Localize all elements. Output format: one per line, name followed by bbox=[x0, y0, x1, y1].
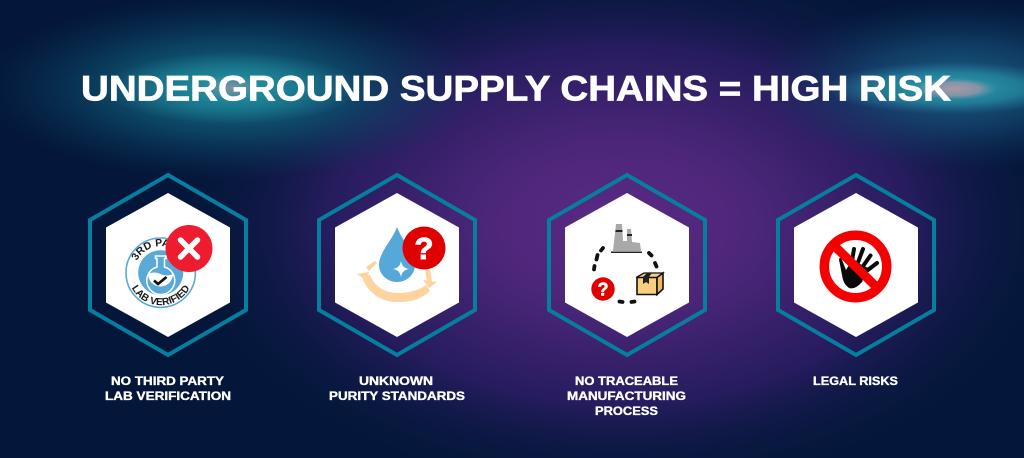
label 3: NO TRACEABLE bbox=[575, 374, 678, 388]
hexagon frame 3 bbox=[549, 175, 705, 355]
icon: lab verified badge with red cross: 3RD PARTY bbox=[132, 239, 168, 260]
panel: no traceable manufacturing process bbox=[549, 175, 705, 418]
panel: unknown purity standards bbox=[319, 175, 475, 403]
panel: legal risks bbox=[778, 175, 934, 388]
hexagon frame 4 bbox=[778, 175, 934, 355]
icon: prohibited hand bbox=[824, 235, 887, 298]
hexagon frame 2 bbox=[319, 175, 475, 355]
label 4: LEGAL RISKS bbox=[813, 374, 898, 388]
icon: factory, box and question mark cycle: ? bbox=[598, 280, 608, 300]
label 1 bbox=[105, 374, 231, 403]
label 2: UNKNOWN bbox=[359, 374, 433, 388]
icon: lab verified badge with red cross: LAB VERIFIED bbox=[132, 284, 188, 306]
label 2 bbox=[329, 374, 465, 403]
icon: factory, box and question mark cycle bbox=[591, 224, 663, 302]
label 3: PROCESS bbox=[595, 404, 658, 418]
title: UNDERGROUND SUPPLY CHAINS = HIGH RISK bbox=[81, 70, 951, 108]
label 3 bbox=[567, 374, 686, 418]
label 2: PURITY STANDARDS bbox=[329, 389, 465, 403]
label 1: LAB VERIFICATION bbox=[105, 389, 231, 403]
label 1: NO THIRD PARTY bbox=[111, 374, 224, 388]
icon: lab verified badge with red cross bbox=[125, 225, 212, 308]
label 3: MANUFACTURING bbox=[567, 389, 686, 403]
panel: no third party lab verification bbox=[88, 172, 248, 403]
icon: water drop with question mark: ? bbox=[415, 231, 433, 266]
icon: water drop with question mark bbox=[357, 226, 446, 302]
hexagon frame 1 bbox=[90, 175, 246, 355]
